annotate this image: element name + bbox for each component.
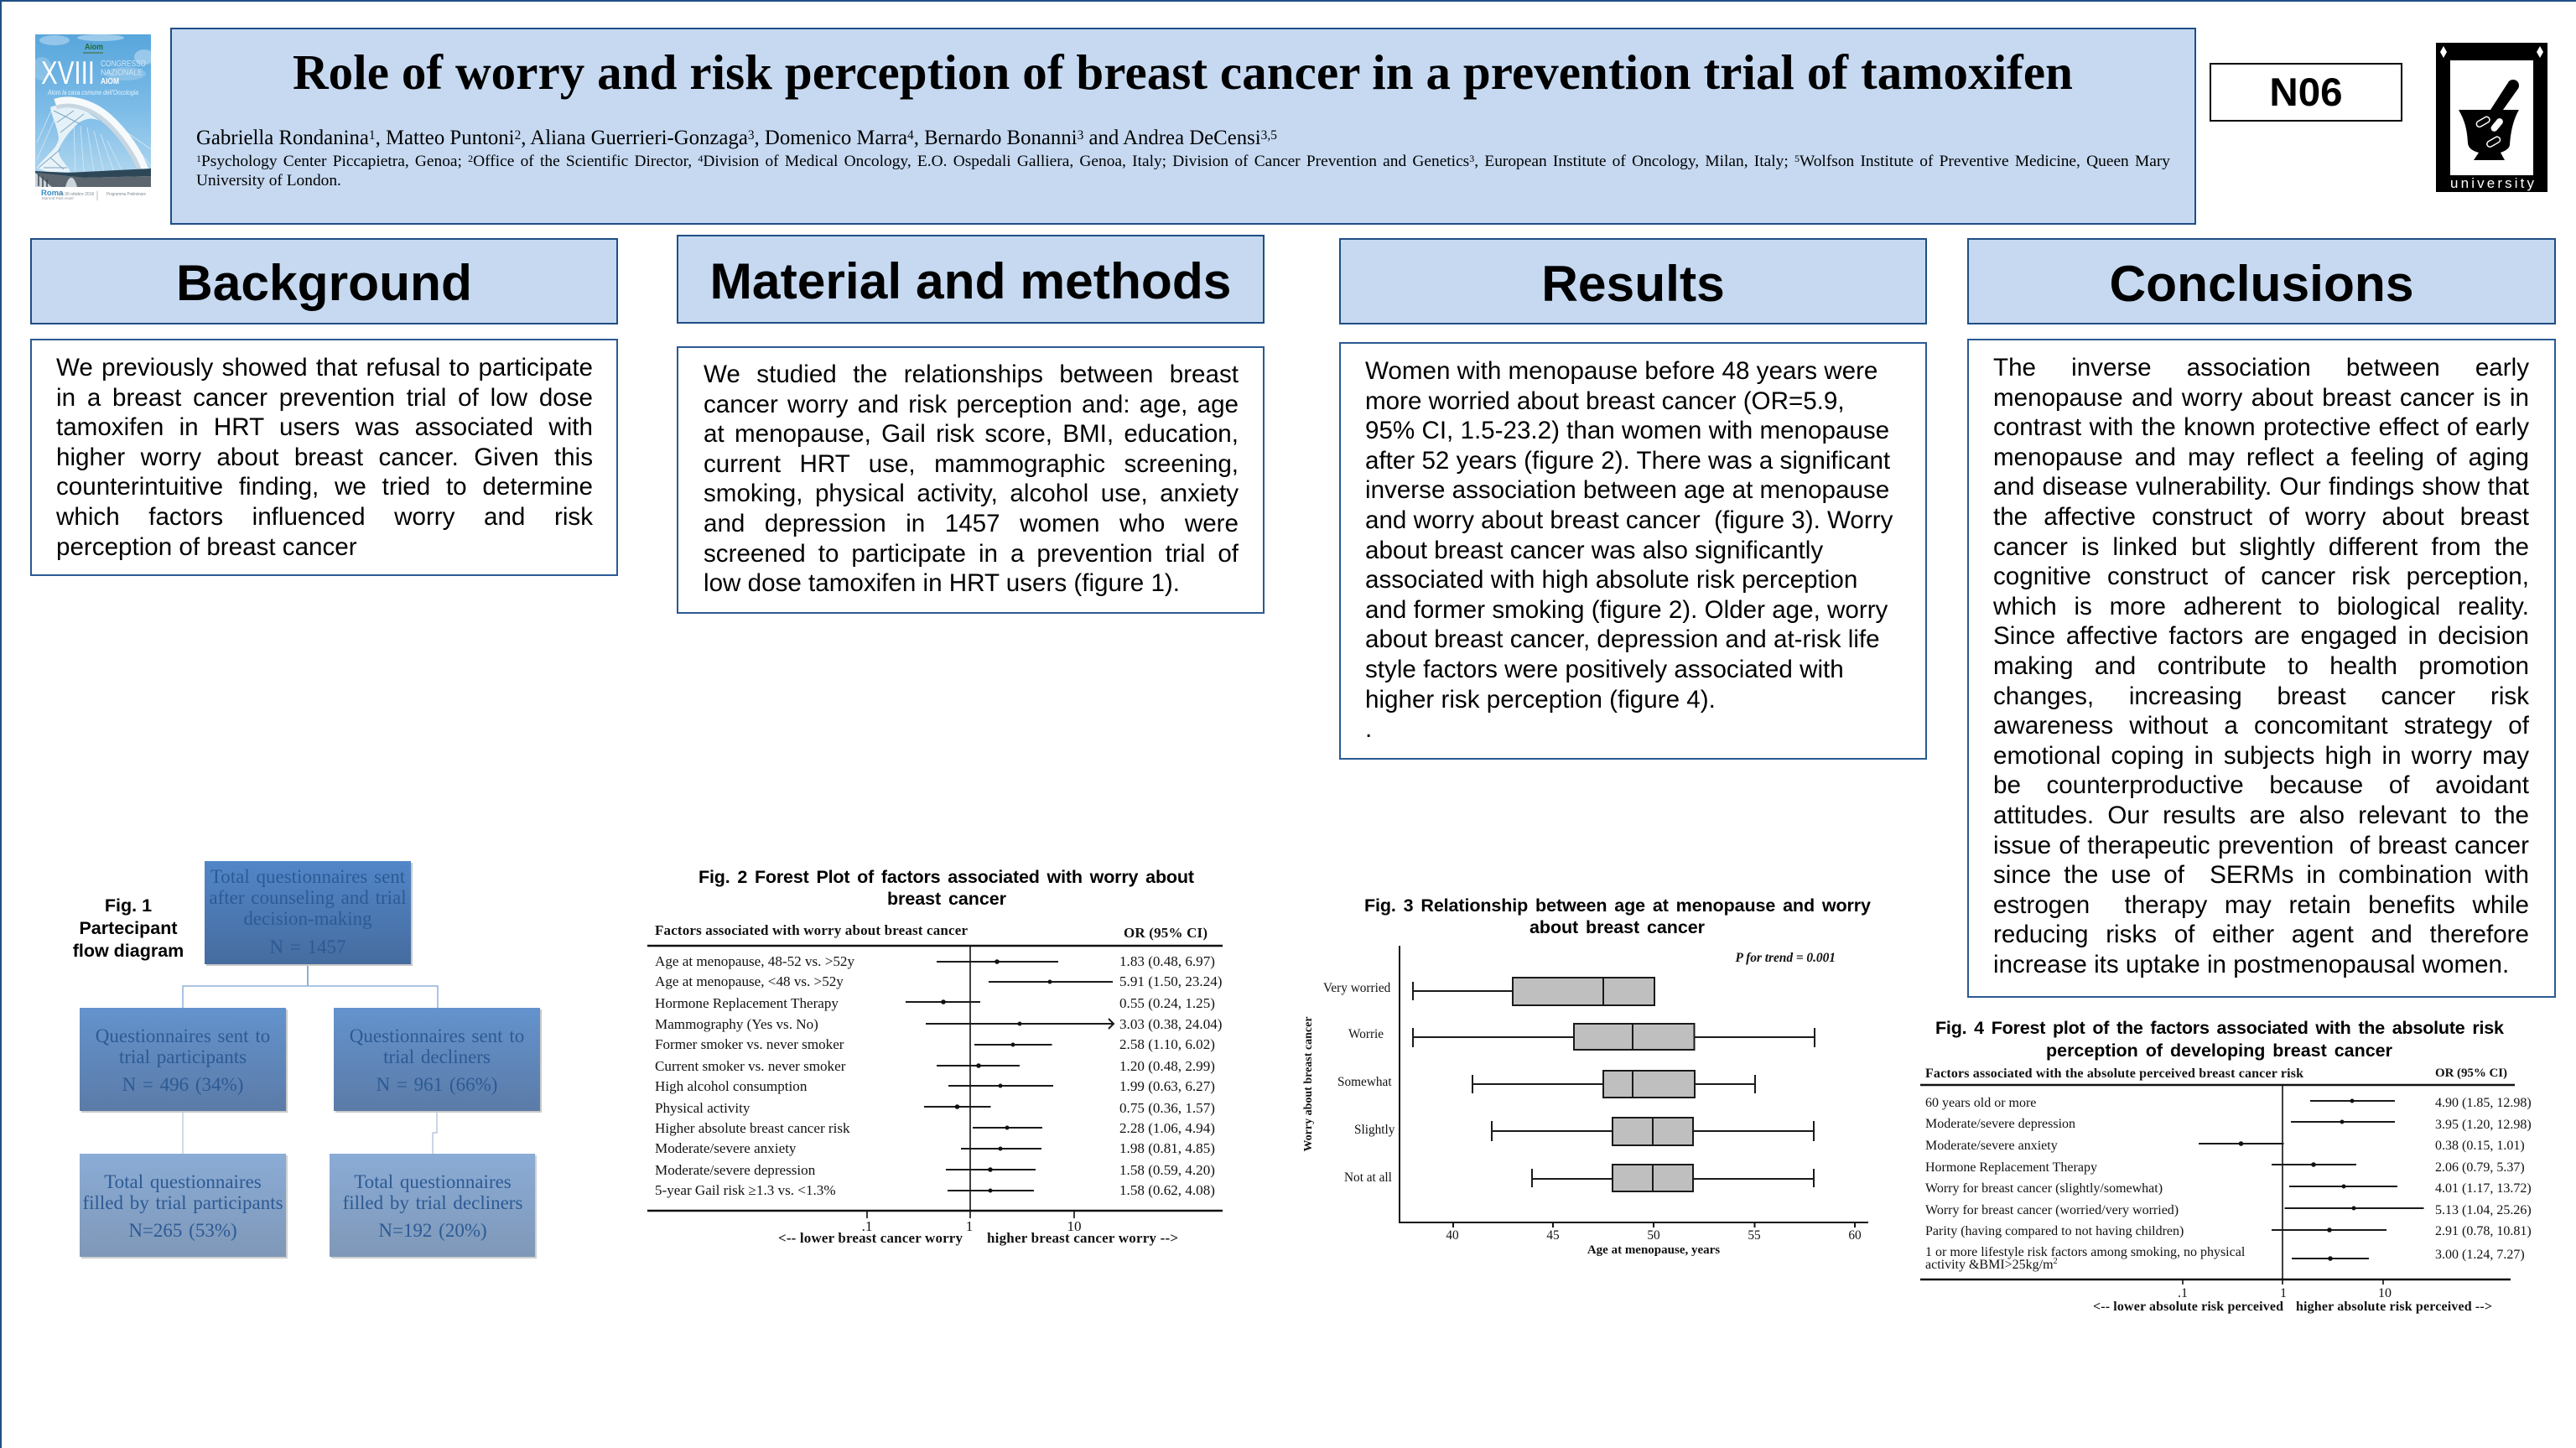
axis category labels: Not at all <box>1344 1170 1392 1185</box>
image: congress poster: XVIII <box>41 55 95 91</box>
forest rows: confidence intervals <box>906 959 1114 1192</box>
chart: figure 2 forest plot: .1 <box>862 1218 872 1234</box>
forest rows: factor labels: Current smoker vs. never smoker <box>655 1058 846 1074</box>
panel: results text: after 52 years (figure 2). There was a significant <box>1365 447 1890 475</box>
forest rows: odds ratios: 1.99 (0.63, 6.27) <box>1119 1078 1215 1094</box>
figure 2 title: Fig. 2 Forest Plot of factors associated with worry about <box>699 867 1194 887</box>
flow box: filled by decliners: filled by trial decliners <box>343 1192 522 1213</box>
forest rows: factor labels: 1 or more lifestyle risk factors among smoking, no physical <box>1925 1245 2246 1259</box>
icon: university logo mortar and pestle <box>2436 43 2547 192</box>
image: congress poster: Marriott Park Hotel <box>42 196 74 200</box>
cables <box>37 109 151 172</box>
figure 1 caption: flow diagram <box>73 941 184 961</box>
flow box: filled by participants: filled by trial participants <box>82 1192 283 1213</box>
forest rows: odds ratios: 1.58 (0.62, 4.08) <box>1119 1182 1215 1198</box>
axis category labels <box>1323 981 1395 1185</box>
poster number box: N06 <box>2269 70 2343 115</box>
forest rows: factor labels <box>655 953 854 1198</box>
image: congress poster: Aiom la casa comune dell'Oncologia <box>47 89 138 96</box>
axis tick labels <box>1446 1228 1862 1243</box>
chart: figure 4 forest plot: <-- lower absolute risk perceived <box>2093 1300 2283 1314</box>
chart: figure 2 forest plot: Factors associated with worry about breast cancer <box>655 922 968 938</box>
panel: conclusions text: contrast with the known protective effect of early <box>1993 413 2529 441</box>
forest rows: odds ratios: 2.06 (0.79, 5.37) <box>2435 1160 2525 1175</box>
forest rows: odds ratios: 3.00 (1.24, 7.27) <box>2435 1248 2525 1262</box>
heading: Background <box>30 238 618 324</box>
flow box: sent to participants <box>80 1008 288 1113</box>
image: congress poster: CONGRESSO <box>101 59 146 69</box>
forest rows: factor labels: Higher absolute breast cancer risk <box>655 1120 850 1136</box>
flow box: filled by decliners: N=192 (20%) <box>378 1220 487 1241</box>
flow box: total sent: N = 1457 <box>269 937 346 958</box>
forest rows: factor labels: activity &BMI>25kg/m <box>1925 1258 2054 1272</box>
figure 2 title: breast cancer <box>887 889 1007 909</box>
flow box: total sent <box>205 861 413 966</box>
panel: background text <box>30 339 618 576</box>
axis category labels: Somewhat <box>1337 1075 1392 1089</box>
panel: conclusions text: making and contribute to health promotion <box>1993 652 2529 680</box>
forest rows: odds ratios: 4.01 (1.17, 13.72) <box>2435 1181 2532 1196</box>
forest rows: factor labels: Worry for breast cancer (slightly/somewhat) <box>1925 1181 2163 1196</box>
chart: figure 2 forest plot: <-- lower breast cancer worry <box>778 1230 963 1246</box>
forest rows: factor labels: High alcohol consumption <box>655 1078 808 1094</box>
heading: Material and methods: Material and methods <box>710 252 1231 309</box>
forest rows: odds ratios: 1.83 (0.48, 6.97) <box>1119 953 1215 969</box>
axis category labels: Worrie <box>1348 1027 1384 1041</box>
forest rows: odds ratios: 1.98 (0.81, 4.85) <box>1119 1140 1215 1156</box>
icon: university logo mortar and pestle: university <box>2450 175 2534 191</box>
authors: Gabriella Rondanina1, Matteo Puntoni2, Aliana Guerrieri-Gonzaga3, Domenico Marra4, Bernardo Bonanni3 and Andrea DeCensi3,5 <box>196 127 1277 149</box>
forest rows: odds ratios <box>2435 1096 2532 1262</box>
panel: methods text: and depression in 1457 women who were <box>704 510 1239 537</box>
axis tick labels: 45 <box>1546 1228 1560 1243</box>
panel: background text: counterintuitive finding, we tried to determine <box>56 473 593 501</box>
panel: conclusions text: Since affective factors are engaged in decision <box>1993 622 2529 650</box>
box: somewhat <box>1472 1071 1755 1098</box>
panel: methods text: We studied the relationships between breast <box>704 361 1239 388</box>
chart: figure 2 forest plot <box>647 922 1223 1246</box>
forest rows: factor labels: Parity (having compared to not having children) <box>1925 1224 2184 1238</box>
flow diagram <box>80 861 542 1259</box>
figure 1 caption: Fig. 1 <box>105 895 152 916</box>
panel: background text: higher worry about breast cancer. Given this <box>56 444 593 471</box>
panel: conclusions text: The inverse association between early <box>1993 354 2529 381</box>
axis title: worry about breast cancer: Worry about breast cancer <box>1302 1016 1315 1152</box>
panel: conclusions text: menopause and may reflect a feeling of aging <box>1993 444 2529 471</box>
box: very worried <box>1413 978 1654 1005</box>
chart: figure 3 box plot <box>1302 946 1868 1257</box>
panel: background text: We previously showed that refusal to participate <box>56 354 593 381</box>
forest rows: factor labels: Hormone Replacement Therapy <box>655 995 839 1011</box>
forest rows: odds ratios: 2.91 (0.78, 10.81) <box>2435 1224 2532 1238</box>
forest rows: odds ratios: 1.20 (0.48, 2.99) <box>1119 1058 1215 1074</box>
panel: conclusions text: reducing risks of either agent and therefore <box>1993 921 2529 948</box>
panel: methods text: low dose tamoxifen in HRT users (figure 1). <box>704 569 1180 597</box>
figure 4 title: perception of developing breast cancer <box>2046 1041 2393 1061</box>
panel: conclusions text: changes, increasing breast cancer risk <box>1993 682 2529 710</box>
flow box: filled by decliners <box>330 1154 537 1259</box>
axis title: age at menopause: Age at menopause, years <box>1587 1243 1720 1257</box>
panel: results text: . <box>1365 715 1372 743</box>
forest rows: odds ratios: 5.91 (1.50, 23.24) <box>1119 973 1223 989</box>
chart: figure 4 forest plot: higher absolute risk perceived --> <box>2296 1300 2492 1314</box>
panel: conclusions text: and disease vulnerability. Our findings show that <box>1993 473 2529 501</box>
flow box: sent to participants: Questionnaires sent to <box>96 1025 270 1046</box>
panel: conclusions text: increase its uptake in postmenopausal women. <box>1993 951 2509 978</box>
panel: conclusions text: attitudes. Our results are also relevant to the <box>1993 802 2529 829</box>
forest rows: factor labels: Age at menopause, 48-52 vs. >52y <box>655 953 854 969</box>
forest rows: odds ratios: 3.95 (1.20, 12.98) <box>2435 1118 2532 1132</box>
panel: conclusions text: emotional coping in subjects high in worry may <box>1993 742 2529 770</box>
image: congress poster: NAZIONALE <box>101 67 143 77</box>
forest rows: factor labels: Moderate/severe depression <box>1925 1117 2075 1131</box>
forest rows: odds ratios: 0.75 (0.36, 1.57) <box>1119 1100 1215 1116</box>
forest rows: factor labels: Worry for breast cancer (worried/very worried) <box>1925 1203 2179 1217</box>
heading: Conclusions <box>1967 238 2556 324</box>
panel: conclusions text: issue of therapeutic prevention of breast cancer <box>1993 832 2529 859</box>
chart: figure 2 forest plot: 1 <box>966 1218 973 1234</box>
figure 4 title: Fig. 4 Forest plot of the factors associated with the absolute risk <box>1935 1018 2504 1038</box>
box: not at all <box>1532 1165 1814 1191</box>
forest rows: odds ratios: 4.90 (1.85, 12.98) <box>2435 1096 2532 1110</box>
flow box: sent to decliners: N = 961 (66%) <box>377 1074 497 1095</box>
forest rows: factor labels: Age at menopause, <48 vs. >52y <box>655 973 844 989</box>
figure 3 title: Fig. 3 Relationship between age at menopause and worry <box>1364 895 1871 916</box>
chart: figure 4 forest plot: OR (95% CI) <box>2435 1067 2507 1080</box>
poster number box <box>2210 63 2402 122</box>
title: Role of worry and risk perception of breast cancer in a prevention trial of tamoxifen <box>293 44 2073 100</box>
panel: results text: associated with high absolute risk perception <box>1365 566 1857 594</box>
panel: conclusions text: since the use of SERMs in combination with <box>1993 861 2529 889</box>
forest rows: confidence intervals <box>2199 1098 2423 1261</box>
forest rows: odds ratios <box>1119 953 1223 1198</box>
heading: Background: Background <box>176 254 472 311</box>
axis tick labels: 40 <box>1446 1228 1459 1243</box>
heading: Material and methods <box>677 235 1265 324</box>
panel: methods text: screened to participate in a prevention trial of <box>704 540 1239 568</box>
figure 1 caption <box>73 895 184 961</box>
panel: background text: in a breast cancer prevention trial of low dose <box>56 384 593 412</box>
axis tick labels: 50 <box>1647 1228 1660 1243</box>
image: congress poster <box>32 34 154 200</box>
panel: results text: and former smoking (figure 2). Older age, worry <box>1365 596 1888 624</box>
forest rows: factor labels: 2 <box>2054 1257 2058 1266</box>
figure 4 title <box>1935 1018 2504 1061</box>
panel: results text: and worry about breast cancer (figure 3). Worry <box>1365 506 1893 534</box>
forest rows: factor labels: 60 years old or more <box>1925 1096 2036 1110</box>
panel: results text: 95% CI, 1.5-23.2) than women with menopause <box>1365 417 1889 444</box>
forest rows: factor labels: Mammography (Yes vs. No) <box>655 1016 818 1032</box>
figure 3 title <box>1364 895 1871 937</box>
figure 2 title <box>699 867 1194 909</box>
left lattice <box>37 105 107 172</box>
panel: conclusions text: the affective construct of worry about breast <box>1993 503 2529 531</box>
panel: results text: about breast cancer, depression and at-risk life <box>1365 625 1880 653</box>
panel: conclusions text: be counterproductive because of avoidant <box>1993 771 2529 799</box>
panel: conclusions text <box>1967 339 2556 998</box>
panel: conclusions text: cancer is linked but slightly different from the <box>1993 533 2529 561</box>
chart: figure 3 box plot: P for trend = 0.001 <box>1736 951 1836 965</box>
forest rows: odds ratios: 0.38 (0.15, 1.01) <box>2435 1139 2525 1153</box>
forest rows: factor labels: Physical activity <box>655 1100 750 1116</box>
flow box: total sent: after counseling and trial <box>209 887 407 908</box>
panel: results text: higher risk perception (figure 4). <box>1365 686 1716 714</box>
forest rows: factor labels: 5-year Gail risk ≥1.3 vs. <1.3% <box>655 1182 836 1198</box>
forest rows: odds ratios: 3.03 (0.38, 24.04) <box>1119 1016 1223 1032</box>
panel: methods text: smoking, physical activity, alcohol use, anxiety <box>704 480 1239 507</box>
forest rows: odds ratios: 2.28 (1.06, 4.94) <box>1119 1120 1215 1136</box>
flow box: filled by participants <box>80 1154 288 1259</box>
panel: conclusions text: menopause and worry about breast cancer is in <box>1993 384 2529 412</box>
panel: background text: which factors influenced worry and risk <box>56 503 593 531</box>
panel: background text: tamoxifen in HRT users was associated with <box>56 413 593 441</box>
panel: results text: about breast cancer was also significantly <box>1365 537 1823 564</box>
flow box: total sent: decision-making <box>243 908 372 929</box>
image: congress poster: Roma <box>41 189 64 198</box>
panel: results text: more worried about breast cancer (OR=5.9, <box>1365 387 1845 415</box>
heading: Results <box>1339 238 1927 324</box>
main white arch <box>55 102 144 173</box>
panel: results text: Women with menopause before 48 years were <box>1365 357 1877 385</box>
chart: figure 2 forest plot: OR (95% CI) <box>1124 925 1208 941</box>
chart: figure 2 forest plot: higher breast cancer worry --> <box>987 1230 1178 1246</box>
panel: methods text: current HRT use, mammographic screening, <box>704 450 1239 478</box>
panel: conclusions text: awareness without a concomitant strategy of <box>1993 712 2529 740</box>
axis tick labels: 60 <box>1848 1228 1862 1243</box>
forest rows: factor labels: Hormone Replacement Therapy <box>1925 1160 2097 1175</box>
panel: background text: perception of breast cancer <box>56 533 357 561</box>
image: congress poster: AIOM <box>101 76 119 86</box>
axis tick labels: 55 <box>1748 1228 1761 1243</box>
flow box: total sent: Total questionnaires sent <box>210 866 406 887</box>
affiliations: 1Psychology Center Piccapietra, Genoa; 2Office of the Scientific Director, 4Division of Medical Oncology, E.O. Ospedali Galliera, Genoa, Italy; Division of Cancer Prevention and Genetics3, European Institute of Oncology, Milan, Italy; 5Wolfson Institute of Preventive Medicine, Queen Mary University of London. <box>196 153 2170 189</box>
heading: Results: Results <box>1541 255 1725 312</box>
flow box: sent to participants: trial participants <box>119 1046 247 1067</box>
deck and road <box>35 169 151 178</box>
panel: methods text: cancer worry and risk perception and: age, age <box>704 391 1239 418</box>
header panel <box>170 28 2196 225</box>
panel: results text <box>1339 342 1927 760</box>
flow box: sent to decliners: trial decliners <box>383 1046 491 1067</box>
chart: figure 2 forest plot: 10 <box>1067 1218 1082 1234</box>
image: congress poster: 26-30 ottobre 2016 <box>59 192 94 197</box>
flow box: sent to decliners: Questionnaires sent to <box>350 1025 524 1046</box>
forest rows: factor labels: Moderate/severe depression <box>655 1162 816 1178</box>
image: congress poster: Aiom <box>85 43 103 52</box>
forest rows: factor labels: Former smoker vs. never smoker <box>655 1036 844 1052</box>
chart: figure 4 forest plot <box>1920 1067 2532 1314</box>
box: slightly <box>1492 1118 1814 1145</box>
panel: conclusions text: which is more adherent to biological reality. <box>1993 593 2529 620</box>
panel: conclusions text: estrogen therapy may retain benefits while <box>1993 891 2529 919</box>
axis category labels: Slightly <box>1354 1123 1395 1137</box>
forest rows: factor labels <box>1925 1096 2246 1272</box>
flow box: filled by participants: Total questionnaires <box>104 1171 262 1192</box>
axis category labels: Very worried <box>1323 981 1391 995</box>
panel: methods text: at menopause, Gail risk score, BMI, education, <box>704 420 1239 448</box>
chart: figure 4 forest plot: Factors associated with the absolute perceived breast cancer risk <box>1925 1067 2303 1081</box>
chart: figure 4 forest plot: 10 <box>2378 1286 2392 1300</box>
forest rows: odds ratios: 5.13 (1.04, 25.26) <box>2435 1203 2532 1217</box>
heading: Conclusions: Conclusions <box>2109 255 2414 312</box>
flow box: filled by decliners: Total questionnaires <box>354 1171 512 1192</box>
panel: conclusions text: cognitive construct of cancer risk perception, <box>1993 563 2529 590</box>
panel: methods text <box>677 346 1265 614</box>
chart: figure 4 forest plot: 1 <box>2280 1286 2287 1300</box>
forest rows: odds ratios: 1.58 (0.59, 4.20) <box>1119 1162 1215 1178</box>
forest rows: odds ratios: 2.58 (1.10, 6.02) <box>1119 1036 1215 1052</box>
forest rows: factor labels: Moderate/severe anxiety <box>1925 1139 2058 1153</box>
box: worried <box>1413 1024 1815 1050</box>
panel: results text: style factors were positively associated with <box>1365 656 1844 683</box>
figure 1 caption: Partecipant <box>79 918 178 938</box>
forest rows: odds ratios: 0.55 (0.24, 1.25) <box>1119 995 1215 1011</box>
flow box: sent to participants: N = 496 (34%) <box>122 1074 243 1095</box>
flow box: sent to decliners <box>334 1008 542 1113</box>
figure 3 title: about breast cancer <box>1530 917 1706 937</box>
image: congress poster: Programma Preliminare <box>106 192 146 197</box>
flow box: filled by participants: N=265 (53%) <box>128 1220 237 1241</box>
chart: figure 4 forest plot: .1 <box>2178 1286 2188 1300</box>
panel: results text: inverse association between age at menopause <box>1365 476 1889 504</box>
forest rows: factor labels: Moderate/severe anxiety <box>655 1140 797 1156</box>
